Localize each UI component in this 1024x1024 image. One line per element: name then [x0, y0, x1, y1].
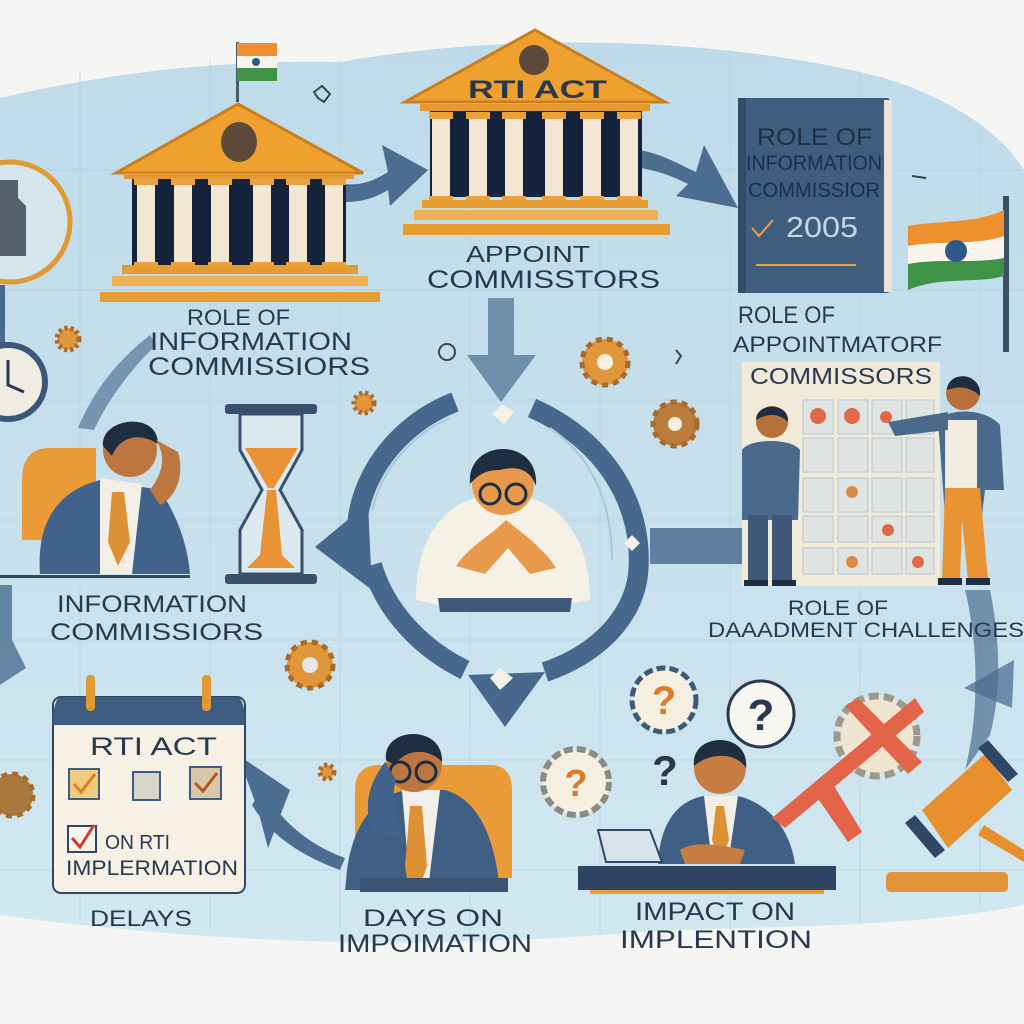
icon: gears — [0, 328, 697, 816]
heading: appoint commissioners: APPOINT — [466, 241, 590, 267]
ring arrowhead bottom — [468, 672, 545, 727]
heading: left temple label: INFORMATION — [150, 328, 352, 356]
heading: days on implementation: IMPOIMATION — [338, 930, 532, 958]
icon: red X with gear — [772, 696, 924, 842]
ring right arc — [532, 408, 639, 672]
heading: days on implementation — [338, 905, 532, 958]
figure: man with laptop — [578, 740, 836, 894]
figure: center thinker — [416, 449, 590, 612]
panel: calendar checklist: IMPLERMATION — [66, 857, 238, 880]
panel: book: 2005 — [786, 212, 858, 244]
heading: appointment label: APPOINTMATORF — [733, 332, 942, 357]
heading: appoint commissioners: COMMISSTORS — [427, 266, 660, 294]
figure: left man — [742, 406, 800, 586]
heading: impact on implementation — [620, 898, 812, 954]
icon: hourglass — [225, 404, 317, 584]
panel: book: COMMISSIOR — [748, 179, 880, 202]
heading: appoint commissioners — [427, 241, 660, 294]
arrow: down to centre — [467, 298, 536, 402]
small marks — [314, 86, 926, 364]
panel: board with two figures — [742, 362, 1004, 586]
heading: information commissioners: COMMISSIORS — [50, 619, 263, 646]
panel: RTI temple — [403, 30, 670, 235]
icon: question gears — [543, 668, 794, 815]
icon: flag top left — [236, 42, 277, 102]
icon: question gears: ? — [652, 747, 678, 794]
heading: information commissioners: INFORMATION — [57, 591, 247, 618]
panel: book — [738, 98, 892, 293]
heading: appointment label: ROLE OF — [738, 302, 835, 329]
arrow: left temple to RTI temple — [345, 145, 428, 206]
heading: information commissioners — [50, 591, 263, 646]
arrow: left curve up — [78, 335, 156, 430]
arrow: right side down — [965, 590, 998, 770]
heading: management challenges: DAAADMENT CHALLENGES — [708, 619, 1024, 642]
ring lower-left arc — [372, 565, 465, 670]
heading: commissioners on board: COMMISSORS — [750, 363, 932, 389]
panel: book: INFORMATION — [746, 152, 882, 175]
heading: left temple label: ROLE OF — [187, 305, 290, 330]
panel: book: ROLE OF — [757, 124, 872, 151]
heading: days on implementation: DAYS ON — [363, 905, 503, 932]
figure: man at desk bottom — [345, 734, 512, 892]
heading: left temple label — [148, 305, 370, 381]
arrow: RTI temple to book — [640, 145, 738, 208]
figure: right man pointing — [888, 376, 1004, 585]
ring left arc — [357, 402, 455, 530]
flow arrows — [0, 145, 1014, 870]
heading: left temple label: COMMISSIORS — [148, 353, 370, 381]
heading: delays: DELAYS — [90, 906, 192, 931]
icon: Indian flag right — [908, 196, 1009, 352]
heading: impact on implementation: IMPLENTION — [620, 926, 812, 954]
icon: emblem and clock left — [0, 162, 70, 419]
figure: tired man at desk — [0, 422, 190, 578]
heading: impact on implementation: IMPACT ON — [635, 898, 795, 926]
icon: question gears: ? — [564, 763, 588, 805]
heading: management challenges — [708, 597, 1024, 642]
panel: calendar checklist — [53, 675, 245, 893]
panel: left temple — [100, 42, 380, 302]
heading: management challenges: ROLE OF — [788, 597, 888, 620]
ring arrowhead left — [315, 503, 372, 590]
heading: appointment label — [733, 302, 942, 357]
arrow: left edge — [0, 585, 26, 685]
icon: question gears: ? — [652, 679, 676, 723]
heading: RTI ACT: RTI ACT — [90, 733, 217, 761]
arrow: calendar to person — [238, 755, 345, 870]
icon: gavel — [886, 740, 1024, 892]
panel: calendar checklist: ON RTI — [105, 832, 170, 854]
arrow: from board to loop — [650, 528, 742, 564]
icon: question gears: ? — [748, 691, 774, 740]
heading: RTI ACT: RTI ACT — [468, 76, 607, 104]
cycle ring — [357, 402, 639, 672]
